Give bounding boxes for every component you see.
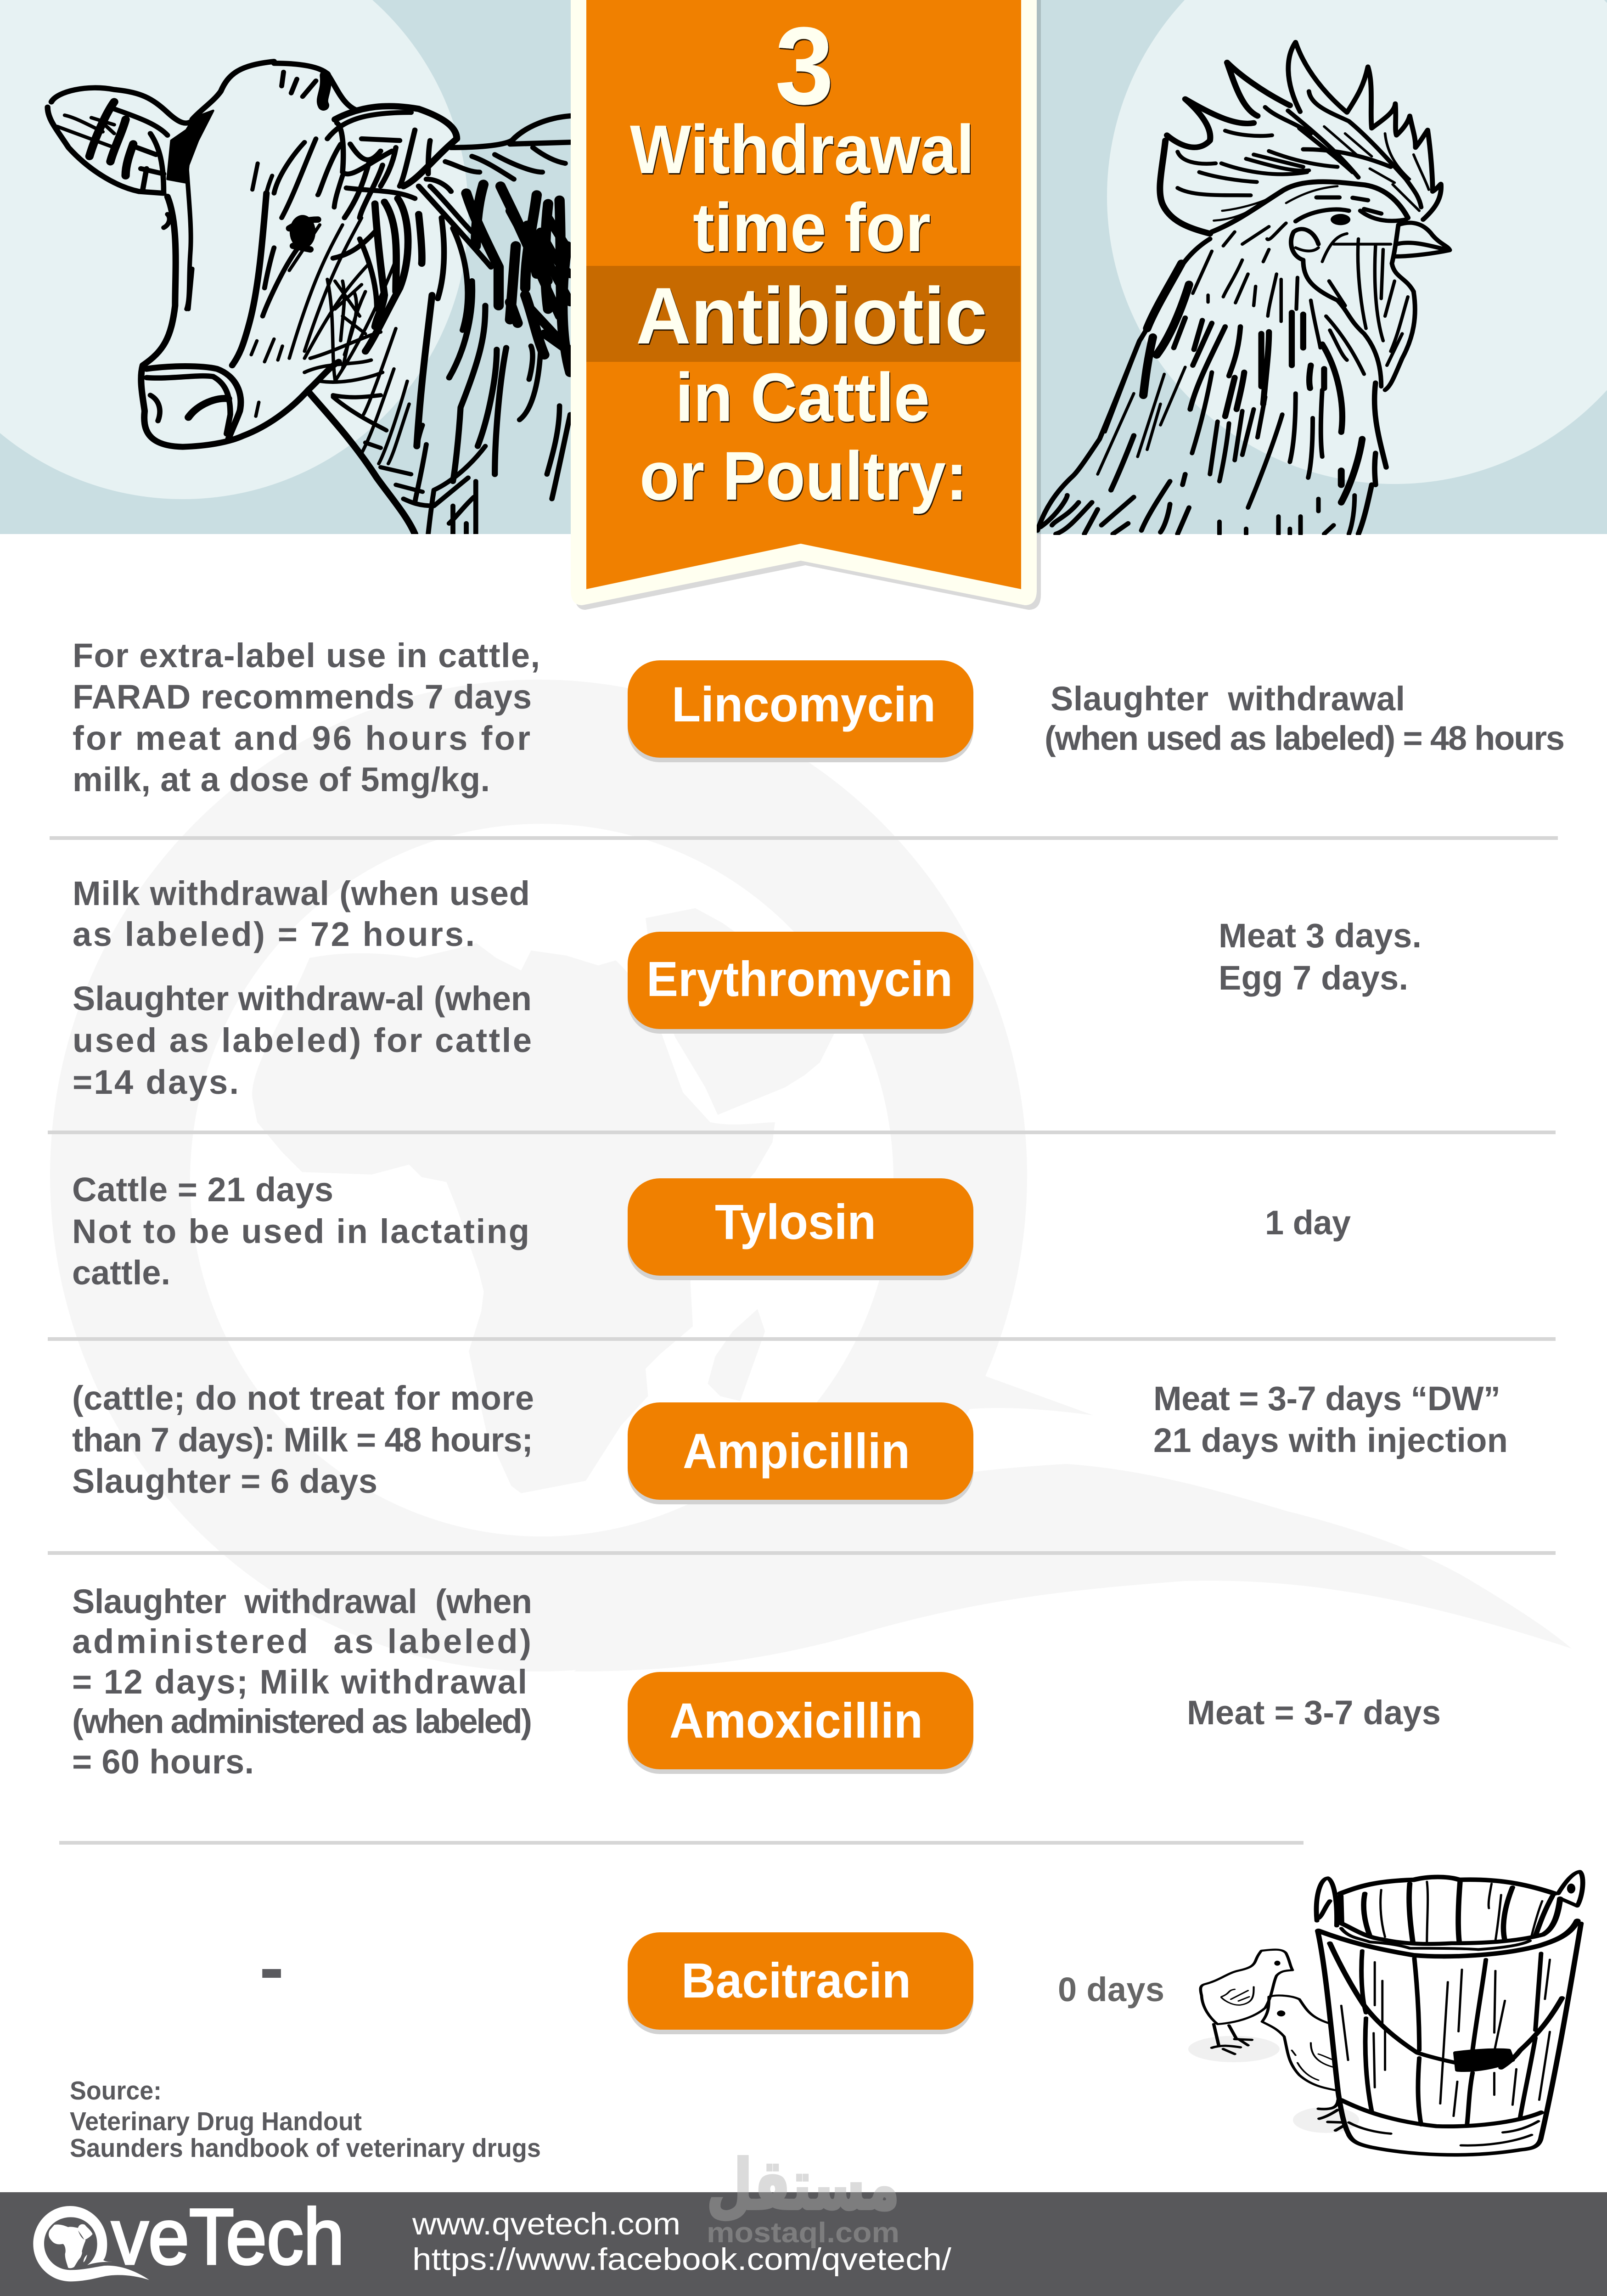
Erythromycin left text: used as labeled) for cattle bbox=[73, 1021, 532, 1059]
heading: Antibiotic bbox=[636, 271, 987, 361]
source credits bbox=[70, 2076, 541, 2163]
Tylosin left text: Not to be used in lactating bbox=[72, 1212, 529, 1250]
Lincomycin left text: milk, at a dose of 5mg/kg. bbox=[73, 760, 490, 799]
Amoxicillin left text: = 60 hours. bbox=[72, 1743, 254, 1781]
mostaql watermark bbox=[707, 2145, 899, 2249]
Erythromycin left text: =14 days. bbox=[73, 1063, 239, 1101]
title ribbon bbox=[571, 0, 1041, 610]
Ampicillin left text: (cattle; do not treat for more bbox=[72, 1379, 534, 1417]
Tylosin left text bbox=[72, 1171, 529, 1292]
Amoxicillin pill: Amoxicillin bbox=[669, 1693, 923, 1748]
footer links: https://www.facebook.com/qvetech/ bbox=[412, 2242, 951, 2277]
footer links: www.qvetech.com bbox=[412, 2206, 680, 2241]
heading bbox=[630, 4, 987, 514]
source credits: Saunders handbook of veterinary drugs bbox=[70, 2133, 541, 2163]
heading: time for bbox=[693, 189, 931, 266]
Amoxicillin left text: (when administered as labeled) bbox=[72, 1702, 532, 1740]
Lincomycin right text: (when used as labeled) = 48 hours bbox=[1045, 719, 1565, 757]
Erythromycin left text: Slaughter withdraw-al (when bbox=[73, 979, 532, 1018]
heading: in Cattle bbox=[675, 359, 930, 436]
Erythromycin right text bbox=[1219, 917, 1422, 997]
ribbon dark highlight band bbox=[586, 266, 1020, 362]
heading: or Poultry: bbox=[640, 437, 967, 514]
Tylosin pill: Tylosin bbox=[715, 1194, 876, 1249]
Erythromycin left text: Milk withdrawal (when used bbox=[73, 874, 530, 912]
Lincomycin pill bbox=[628, 660, 973, 762]
footer links bbox=[412, 2206, 951, 2277]
Lincomycin left text: For extra-label use in cattle, bbox=[73, 636, 540, 675]
Erythromycin right text: Meat 3 days. bbox=[1219, 917, 1422, 955]
row: Ampicillin bbox=[72, 1379, 1508, 1504]
logo: QveTech: veTech bbox=[112, 2193, 344, 2281]
Amoxicillin right text: Meat = 3-7 days bbox=[1187, 1694, 1441, 1732]
Lincomycin left text: FARAD recommends 7 days bbox=[73, 678, 532, 716]
Ampicillin right text bbox=[1153, 1379, 1508, 1459]
Amoxicillin left text: = 12 days; Milk withdrawal bbox=[72, 1663, 527, 1701]
Lincomycin right text bbox=[1045, 680, 1565, 757]
illustration: chicks and wooden bucket bbox=[1188, 1872, 1583, 2155]
Tylosin left text: cattle. bbox=[72, 1254, 170, 1292]
Amoxicillin left text: administered as labeled) bbox=[72, 1622, 531, 1660]
row: Amoxicillin bbox=[72, 1582, 1441, 1781]
header band bbox=[0, 0, 1607, 534]
Tylosin right text: 1 day bbox=[1265, 1204, 1351, 1242]
Amoxicillin left text bbox=[72, 1582, 532, 1781]
ribbon shadow bbox=[575, 0, 1041, 610]
ribbon orange body bbox=[586, 0, 1021, 589]
Ampicillin pill: Ampicillin bbox=[683, 1423, 910, 1479]
heading: 3 bbox=[775, 4, 834, 127]
Erythromycin pill bbox=[628, 932, 973, 1034]
mostaql watermark: مستقل bbox=[707, 2145, 899, 2225]
Amoxicillin pill bbox=[628, 1672, 973, 1774]
Tylosin left text: Cattle = 21 days bbox=[72, 1171, 333, 1209]
background watermark: faint globe logo bbox=[50, 680, 1572, 1671]
Ampicillin left text bbox=[72, 1379, 534, 1500]
Bacitracin pill: Bacitracin bbox=[681, 1953, 911, 2008]
source credits: Source: bbox=[70, 2076, 162, 2105]
row: Bacitracin bbox=[259, 1926, 1164, 2034]
divider rules bbox=[48, 836, 1558, 1845]
Erythromycin pill: Erythromycin bbox=[646, 951, 953, 1007]
Ampicillin left text: Slaughter = 6 days bbox=[72, 1462, 377, 1500]
footer bar bbox=[0, 2192, 1607, 2296]
Erythromycin left text: as labeled) = 72 hours. bbox=[73, 915, 475, 953]
illustration: rooster head bbox=[1038, 42, 1450, 534]
Amoxicillin left text: Slaughter withdrawal (when bbox=[72, 1582, 532, 1621]
Ampicillin pill bbox=[628, 1402, 973, 1504]
Erythromycin left text bbox=[73, 874, 532, 1101]
Lincomycin right text: Slaughter withdrawal bbox=[1051, 680, 1405, 718]
Bacitracin pill bbox=[628, 1932, 973, 2034]
row: Tylosin bbox=[72, 1171, 1351, 1292]
Lincomycin left text: for meat and 96 hours for bbox=[73, 719, 530, 757]
Lincomycin pill: Lincomycin bbox=[672, 676, 936, 732]
ribbon cream border bbox=[571, 0, 1037, 605]
Tylosin pill bbox=[628, 1178, 973, 1280]
Bacitracin left dash: - bbox=[259, 1926, 284, 2008]
left pale circle bbox=[0, 0, 468, 499]
illustration: cow head bbox=[48, 62, 570, 534]
Ampicillin left text: than 7 days): Milk = 48 hours; bbox=[72, 1421, 533, 1459]
Lincomycin left text bbox=[73, 636, 540, 799]
heading: Withdrawal bbox=[630, 111, 974, 188]
row: Lincomycin bbox=[73, 636, 1565, 799]
Erythromycin right text: Egg 7 days. bbox=[1219, 959, 1408, 997]
mostaql watermark: mostaql.com bbox=[707, 2217, 899, 2249]
source credits: Veterinary Drug Handout bbox=[70, 2107, 362, 2136]
row: Erythromycin bbox=[73, 874, 1422, 1101]
Ampicillin right text: Meat = 3-7 days “DW” bbox=[1153, 1379, 1500, 1418]
Ampicillin right text: 21 days with injection bbox=[1153, 1421, 1508, 1459]
Bacitracin right text: 0 days bbox=[1058, 1970, 1164, 2009]
